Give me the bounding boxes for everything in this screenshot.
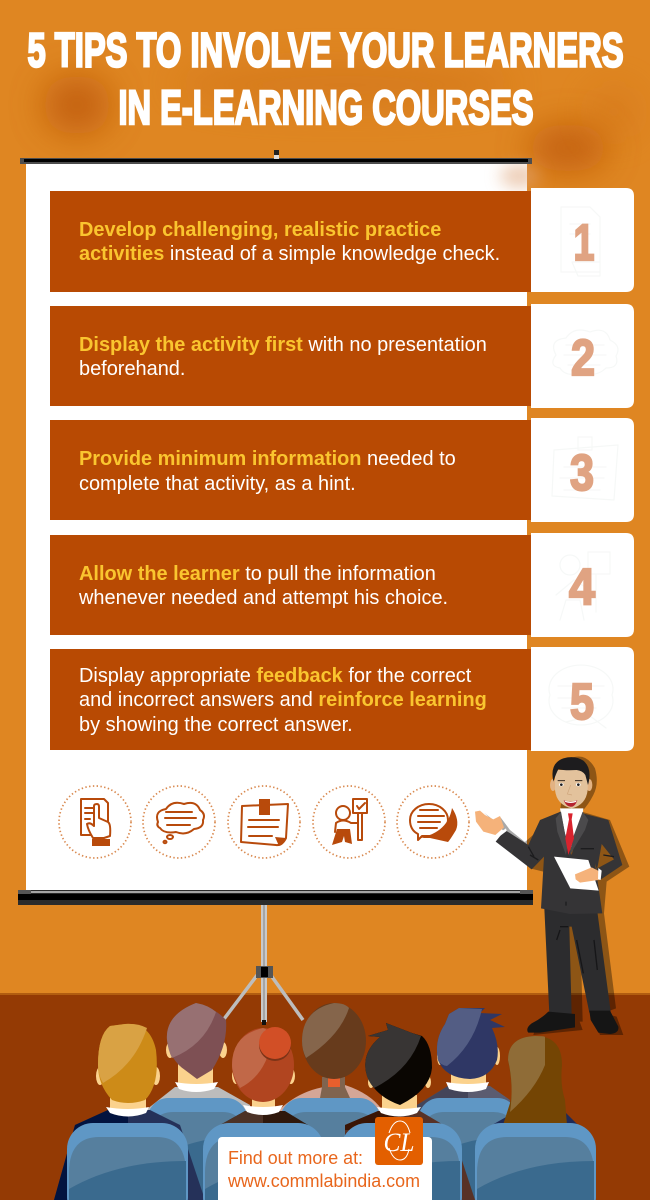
icon: thought cloud xyxy=(143,786,215,858)
tip 4: Allow the learner to pull the information xyxy=(79,563,436,585)
icon: speech bubbles xyxy=(397,786,469,858)
find out more card: www.commlabindia.com xyxy=(227,1170,420,1191)
person: navy suit, long brown hair xyxy=(492,1036,578,1200)
tip 4: whenever needed and attempt his choice. xyxy=(78,587,448,609)
number card 1 xyxy=(531,188,634,292)
hand on paper xyxy=(575,867,600,883)
tip 5: and incorrect answers and reinforce learning xyxy=(79,689,487,711)
ears xyxy=(550,779,556,791)
tip 5: Display appropriate feedback for the correct xyxy=(79,665,472,687)
audience back row xyxy=(146,1003,520,1200)
number card 2 xyxy=(531,304,634,408)
back row seats xyxy=(146,1098,520,1198)
person: grey jacket, mauve hair xyxy=(146,1003,250,1200)
screen smudge xyxy=(500,164,540,188)
presenter xyxy=(475,756,629,1035)
find out more card xyxy=(218,1137,432,1200)
icon: hand on document xyxy=(59,786,131,858)
tip 1 xyxy=(50,191,531,292)
face xyxy=(555,770,588,808)
hair xyxy=(552,757,590,785)
front row seats xyxy=(67,1123,596,1200)
tip 3: complete that activity, as a hint. xyxy=(79,473,356,495)
number card 3: 3 xyxy=(570,444,594,501)
icon: pinned note xyxy=(228,786,300,858)
presenter shadow xyxy=(523,756,629,1035)
jacket xyxy=(496,812,622,914)
projector stand xyxy=(224,904,303,1025)
person: brown jacket, red hair xyxy=(220,1027,308,1200)
number card 5 xyxy=(531,647,634,751)
icon: person with check sign xyxy=(313,786,385,858)
sleeve folds xyxy=(528,847,614,906)
number card 1: 1 xyxy=(574,214,594,271)
facial features xyxy=(558,781,582,807)
shirt xyxy=(560,808,583,847)
trousers xyxy=(544,908,611,1015)
bottom roller xyxy=(18,890,533,905)
person: pink jacket, brown hair xyxy=(279,1003,385,1200)
person: dark suit, blue hair xyxy=(417,1008,510,1200)
background smudges xyxy=(43,63,638,172)
tip 1: activities instead of a simple knowledge check. xyxy=(79,243,500,265)
tip 1: Develop challenging, realistic practice xyxy=(79,219,441,241)
audience front row xyxy=(54,1023,596,1200)
tip 5 xyxy=(50,649,531,750)
commlab logo xyxy=(375,1117,423,1165)
tip 3: Provide minimum information needed to xyxy=(79,448,456,470)
number card 4: 4 xyxy=(569,558,596,615)
floor xyxy=(0,993,650,1200)
top roller xyxy=(20,150,532,164)
shoes xyxy=(527,1012,575,1033)
tip 5: by showing the correct answer. xyxy=(79,714,353,736)
person: dark suit, black hair xyxy=(345,1023,475,1200)
tie xyxy=(565,813,574,855)
raised hand xyxy=(475,811,504,835)
commlab logo: CL xyxy=(384,1128,414,1157)
tip 2 xyxy=(50,306,531,406)
title xyxy=(28,24,624,135)
arm gap xyxy=(597,844,614,868)
find out more card: Find out more at: xyxy=(228,1148,363,1168)
tip 2: beforehand. xyxy=(79,358,185,380)
number card 5: 5 xyxy=(570,673,594,730)
number card 2: 2 xyxy=(571,329,595,386)
lapels xyxy=(556,812,588,856)
tip 3 xyxy=(50,420,531,520)
tip 2: Display the activity first with no presentation xyxy=(79,334,487,356)
projector screen xyxy=(18,150,540,905)
hand shadow on screen xyxy=(484,813,527,846)
number card 4 xyxy=(531,533,634,637)
number card 3 xyxy=(531,418,634,522)
tip 4 xyxy=(50,535,531,635)
paper xyxy=(554,857,599,891)
person: navy suit, golden hair xyxy=(54,1024,205,1200)
